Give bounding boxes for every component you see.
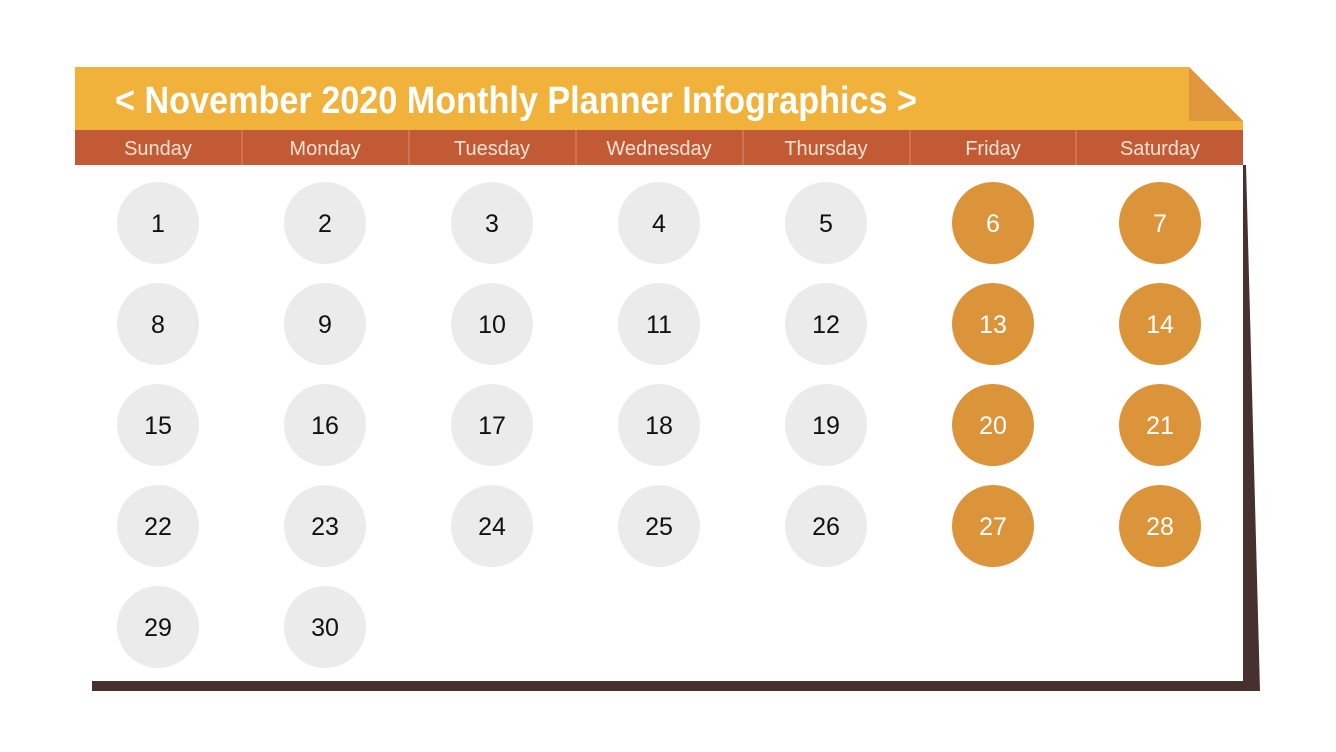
day circles grid: 23 [311,513,339,541]
day circles grid: 12 [812,311,840,339]
day circles grid: 13 [979,311,1007,339]
day circles grid: 28 [1146,513,1174,541]
day circles grid: 7 [1153,210,1167,238]
day circles grid: 2 [318,210,332,238]
day circles grid: 5 [819,210,833,238]
day circles grid: 30 [311,614,339,642]
day circles grid: 22 [144,513,172,541]
day circles grid: 1 [151,210,165,238]
day circles grid [117,182,1201,668]
day circles grid: 4 [652,210,666,238]
day circles grid: 26 [812,513,840,541]
day circles grid: 21 [1146,412,1174,440]
day circles grid: 14 [1146,311,1174,339]
weekday bar: Friday [965,138,1021,160]
day circles grid: 29 [144,614,172,642]
day circles grid: 9 [318,311,332,339]
day circles grid: 3 [485,210,499,238]
day circles grid: 6 [986,210,1000,238]
day circles grid: 19 [812,412,840,440]
weekday bar: Sunday [124,138,192,160]
weekday bar: Saturday [1120,138,1200,160]
day circles grid: 8 [151,311,165,339]
day circles grid: 24 [478,513,506,541]
day circles grid: 25 [645,513,673,541]
day circles grid: 18 [645,412,673,440]
day circles grid: 15 [144,412,172,440]
calendar shadow [92,165,1260,691]
day circles grid: 20 [979,412,1007,440]
title: < November 2020 Monthly Planner Infographics > [115,80,917,122]
weekday bar: Monday [289,138,361,160]
day circles grid: 27 [979,513,1007,541]
day circles grid: 11 [646,311,672,339]
day circles grid: 10 [478,311,506,339]
day circles grid: 17 [478,412,506,440]
weekday bar: Wednesday [606,138,712,160]
weekday bar [75,130,1243,165]
weekday bar: Tuesday [454,138,530,160]
day circles grid: 16 [311,412,339,440]
page fold [1189,67,1243,121]
header banner [75,67,1243,130]
weekday bar: Thursday [784,138,868,160]
calendar card [75,165,1243,681]
